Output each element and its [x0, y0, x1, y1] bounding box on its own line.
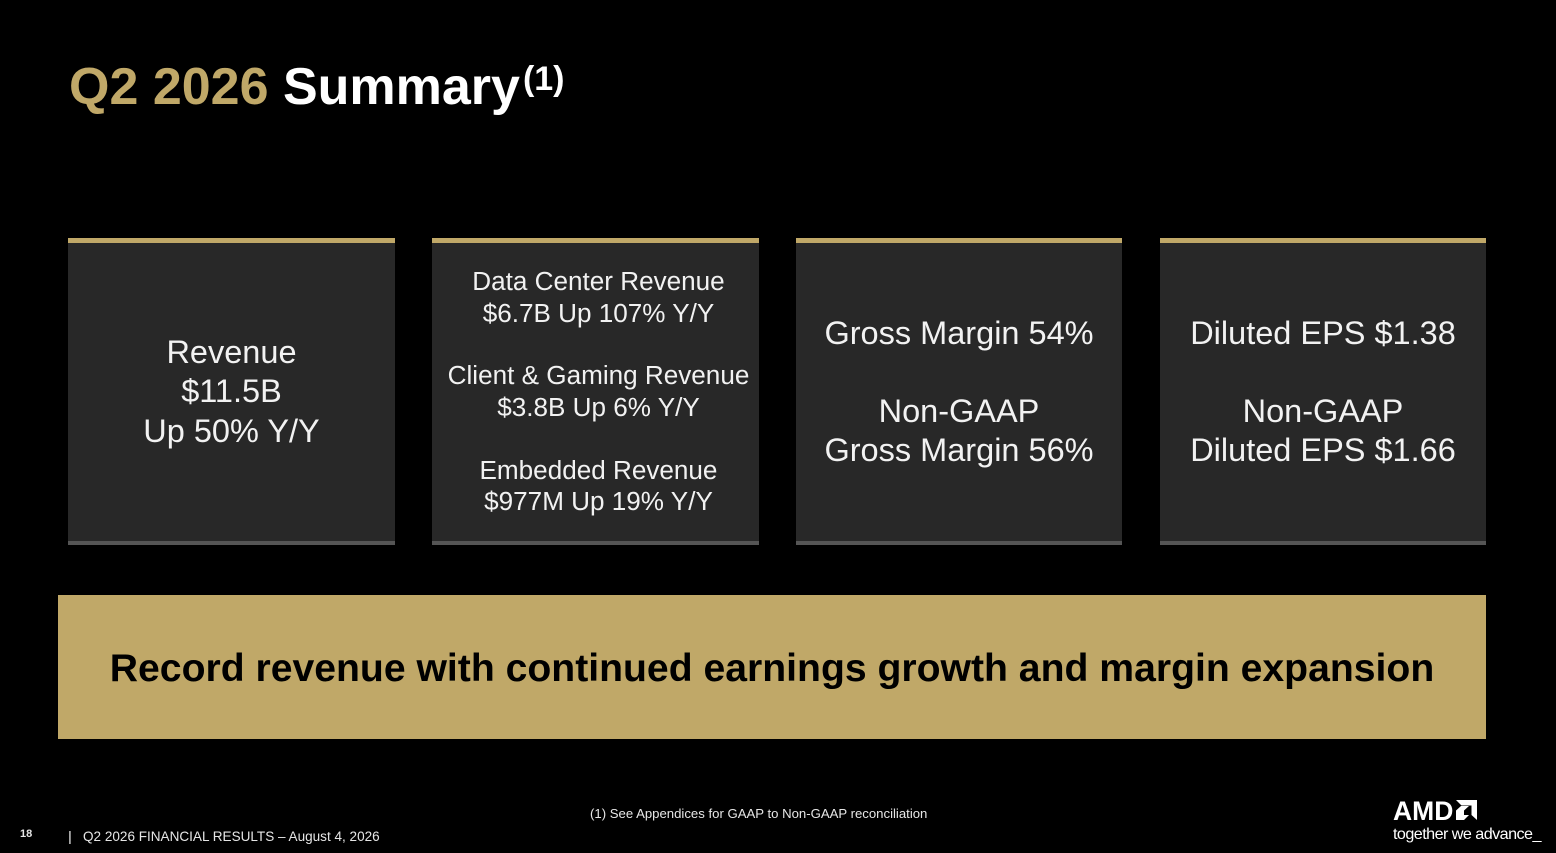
footer separator: |: [68, 829, 72, 844]
revenue text: [143, 334, 320, 448]
gross margin text: Gross Margin 54%: [824, 314, 1094, 350]
banner text: Record revenue with continued earnings growth and margin expansion: [110, 647, 1434, 690]
embedded revenue: Embedded Revenue: [480, 454, 717, 484]
data center revenue: [472, 266, 725, 328]
data center revenue: $6.7B Up 107% Y/Y: [483, 298, 714, 328]
gross margin text: [824, 314, 1094, 468]
diluted EPS text: Diluted EPS $1.66: [1190, 432, 1456, 468]
panel: segment revenue: [432, 238, 758, 545]
revenue text: Up 50% Y/Y: [143, 412, 320, 448]
client and gaming revenue: [448, 360, 749, 422]
gross margin text: Gross Margin 56%: [824, 432, 1094, 468]
title: Q2 2026 Summary(1): [69, 58, 565, 116]
AMD wordmark: AMD: [1393, 796, 1453, 826]
embedded revenue: [480, 454, 717, 516]
diluted EPS text: Diluted EPS $1.38: [1190, 314, 1456, 350]
logo: AMD together we advance: [1393, 796, 1542, 843]
revenue text: Revenue: [166, 334, 297, 370]
panel: revenue: [68, 238, 394, 545]
diluted EPS text: [1190, 314, 1456, 468]
tagline: together we advance_: [1393, 826, 1541, 843]
icon: AMD arrow: [1456, 800, 1477, 820]
footnote: (1) See Appendices for GAAP to Non-GAAP reconciliation: [590, 806, 927, 821]
data center revenue: Data Center Revenue: [472, 266, 725, 296]
gross margin text: Non-GAAP: [879, 392, 1039, 428]
page number: 18: [20, 828, 32, 840]
revenue text: $11.5B: [181, 373, 282, 409]
embedded revenue: $977M Up 19% Y/Y: [484, 486, 713, 516]
footer text: Q2 2026 FINANCIAL RESULTS – August 4, 2026: [83, 829, 380, 844]
client and gaming revenue: Client & Gaming Revenue: [448, 360, 749, 390]
client and gaming revenue: $3.8B Up 6% Y/Y: [497, 392, 700, 422]
panel: gross margin: [796, 238, 1122, 545]
callout banner: [58, 595, 1486, 739]
panel: diluted EPS: [1160, 238, 1486, 545]
diluted EPS text: Non-GAAP: [1243, 392, 1403, 428]
